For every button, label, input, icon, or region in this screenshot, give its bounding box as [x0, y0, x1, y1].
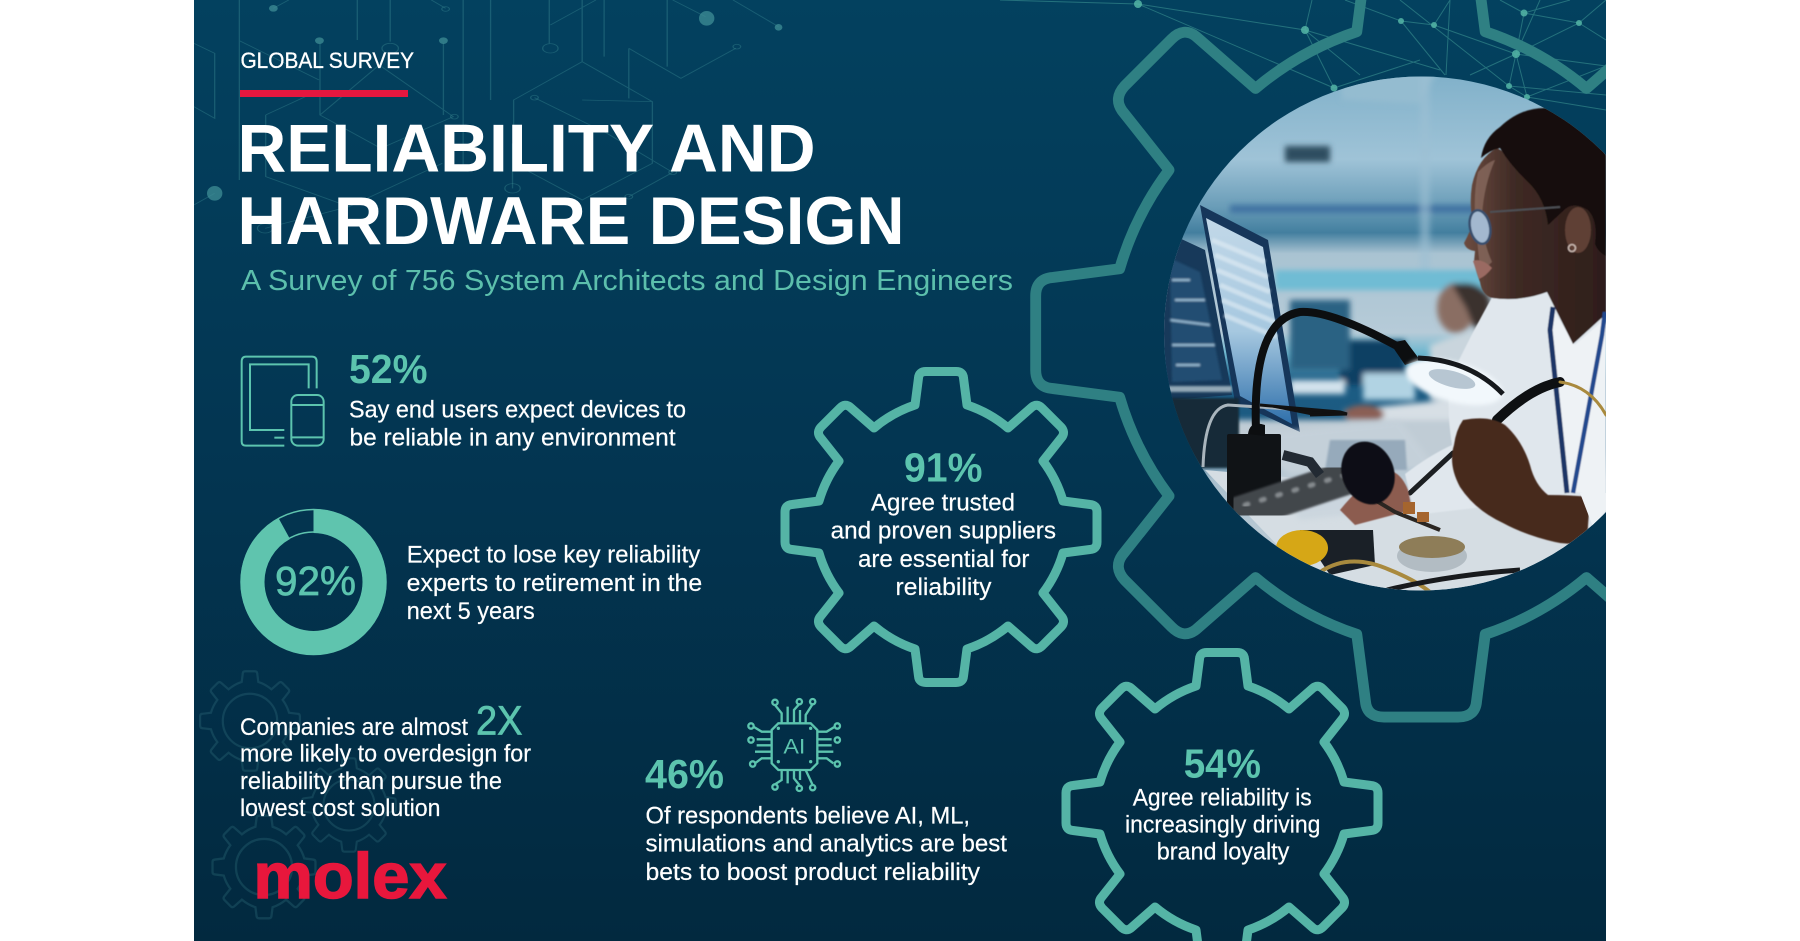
gear callout: 54%: increasingly driving: [1125, 811, 1320, 838]
stat: 92% retirement: 92%: [275, 558, 356, 604]
large gear outline: [1030, 0, 1606, 722]
stat: 46% AI: [645, 699, 1007, 886]
title: HARDWARE DESIGN: [238, 183, 904, 259]
donut chart: [241, 510, 386, 654]
stat: 2X overdesign: [241, 706, 531, 816]
infographic: [194, 0, 1606, 941]
woman: [1405, 108, 1606, 532]
stat: 92% retirement: Expect to lose key reliability: [407, 542, 700, 569]
stat: 2X overdesign: lowest cost solution: [240, 795, 440, 822]
soldering iron: [1410, 382, 1606, 493]
stat: 46% AI: bets to boost product reliability: [646, 859, 980, 886]
title: RELIABILITY AND: [238, 110, 816, 186]
gear callout: 91%: reliability: [896, 574, 992, 601]
section label: GLOBAL SURVEY: [240, 48, 414, 73]
stat: 46% AI: simulations and analytics are best: [646, 831, 1007, 858]
photo: engineer at workbench: [1160, 70, 1610, 600]
stat: 52% devices: be reliable in any environment: [350, 425, 676, 452]
hand: [1452, 418, 1590, 544]
lamp gooseneck: [1256, 312, 1395, 430]
stat: 52% devices: [242, 346, 686, 452]
icon: AI chip: [748, 699, 840, 791]
gear callout: 54%: brand loyalty: [1157, 838, 1289, 865]
stat: 46% AI: 46%: [645, 751, 724, 797]
title: [242, 124, 900, 244]
stat: 52% devices: Say end users expect devices to: [349, 397, 686, 424]
stat: 2X overdesign: 2X: [476, 697, 522, 743]
logo: molex: molex: [254, 840, 447, 912]
stat: 46% AI: Of respondents believe AI, ML,: [646, 802, 970, 829]
gear callout: 91%: [785, 372, 1097, 682]
subtitle: A Survey of 756 System Architects and Design Engineers: [241, 265, 1013, 297]
icon: AI chip: AI: [783, 734, 805, 758]
gear callout: 91%: 91%: [904, 444, 982, 490]
red accent bar: [240, 90, 408, 97]
stat: 2X overdesign: reliability than pursue the: [240, 768, 502, 795]
stat: 2X overdesign: more likely to overdesign for: [240, 741, 531, 768]
gear callout: 91%: and proven suppliers: [831, 518, 1056, 545]
icon: tablet and phone: [242, 357, 324, 446]
gear callout: 54%: Agree reliability is: [1133, 784, 1312, 812]
gear callout: 91%: are essential for: [858, 546, 1029, 573]
stat: 92% retirement: [241, 510, 702, 654]
stat: 52% devices: 52%: [349, 346, 428, 392]
gear callout: 54%: 54%: [1184, 740, 1261, 786]
ring light magnifier: [1394, 340, 1505, 406]
blurred tool: [1240, 434, 1403, 513]
stat: 92% retirement: next 5 years: [407, 598, 535, 625]
gear callout: 54%: [1066, 652, 1378, 941]
gear callout: 91%: Agree trusted: [871, 489, 1015, 516]
stat: 92% retirement: experts to retirement in the: [407, 570, 702, 597]
faint decorative gears: [200, 671, 396, 918]
stat: 2X overdesign: Companies are almost: [240, 714, 468, 741]
panel: survey infographic: [194, 0, 1606, 941]
